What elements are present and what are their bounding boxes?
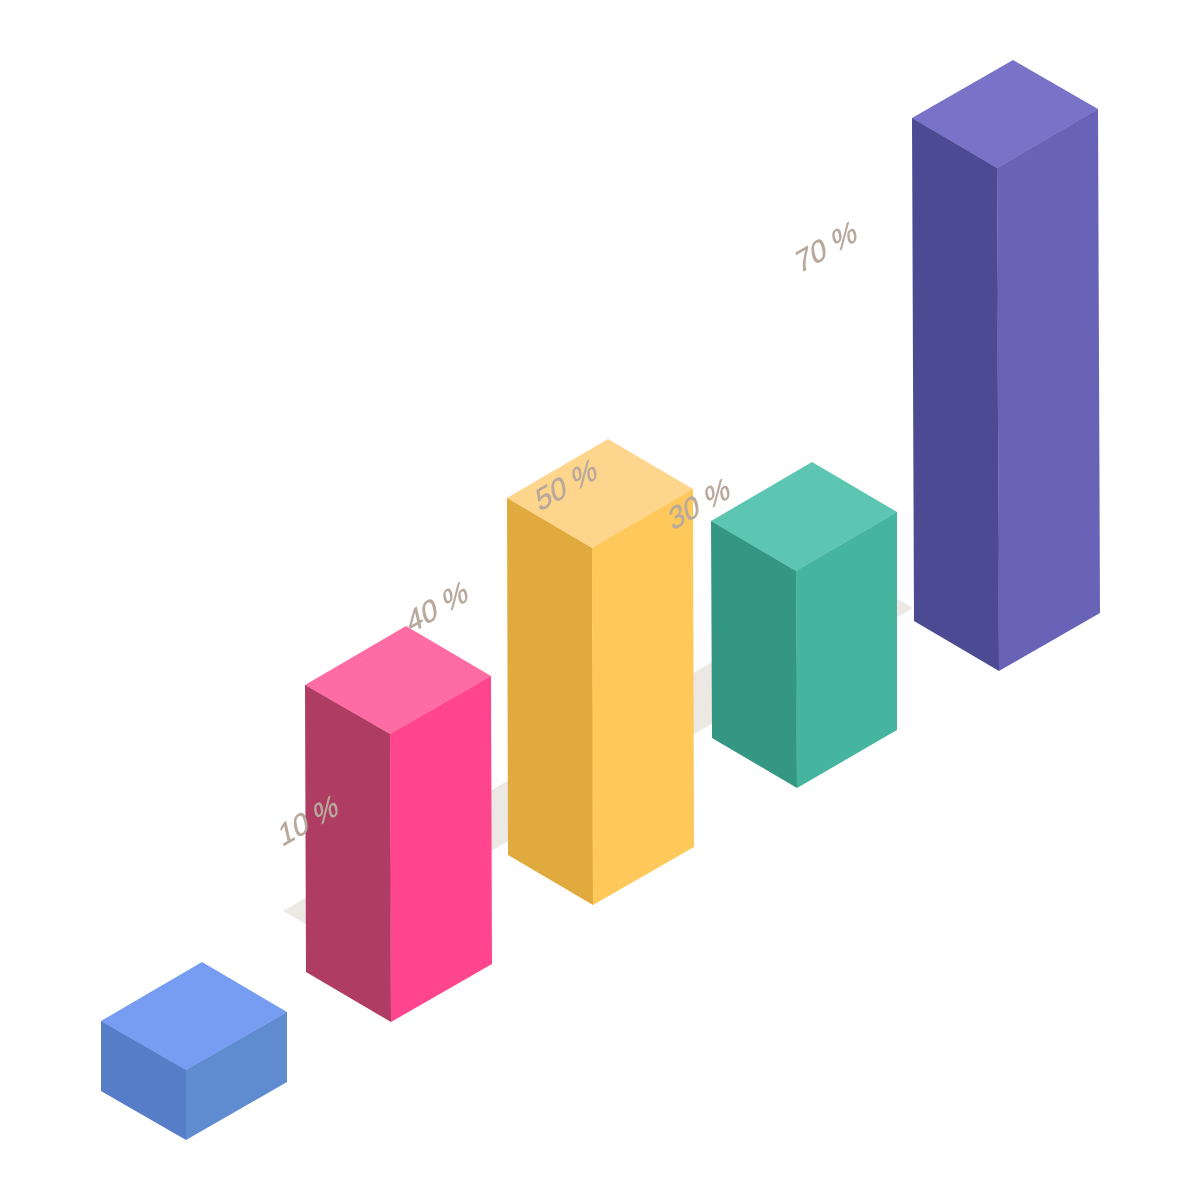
bar: 50% yellow [507,439,694,905]
label: 30 %: 30 % [666,471,733,538]
label: 70 %: 70 % [793,214,860,281]
bar: 30% green [711,462,897,788]
bar: 10% blue [101,962,287,1140]
label: 40 %: 40 % [404,574,471,641]
bar: 40% pink [305,626,492,1022]
floor strip [283,577,913,941]
label: 50 %: 50 % [533,452,600,519]
label: 10 %: 10 % [276,788,341,854]
bar: 70% purple [912,60,1100,671]
